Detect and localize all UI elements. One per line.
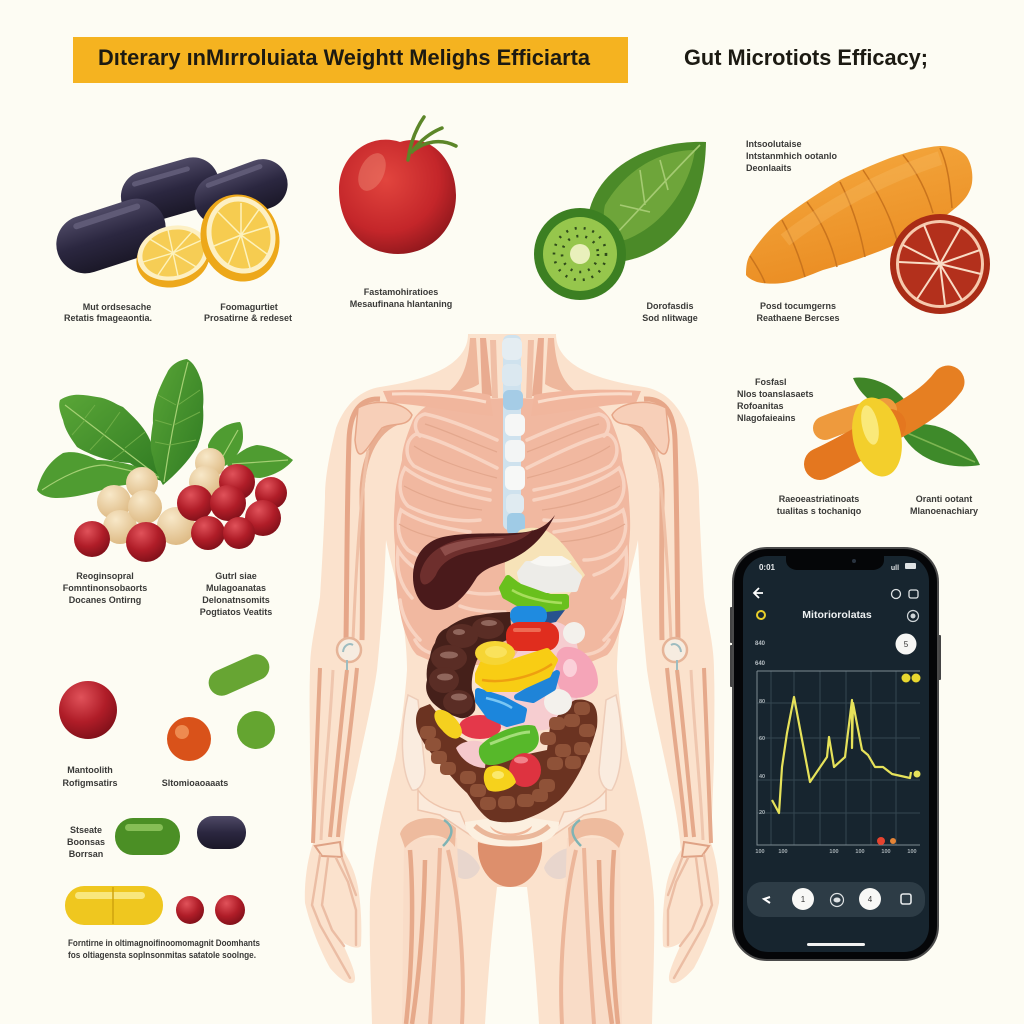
text labels: Retatis fmageaontia. xyxy=(64,313,152,323)
nav icons xyxy=(754,588,763,598)
stomach area behind organs xyxy=(505,528,585,600)
green upper band xyxy=(502,578,566,610)
blue behind xyxy=(517,673,557,700)
text labels: Nlagofaieains xyxy=(737,413,796,423)
food: carrots, yellow pill and leaves xyxy=(820,377,980,481)
line chart: 100 xyxy=(855,849,865,855)
spine xyxy=(502,335,525,535)
line chart: 100 xyxy=(881,849,891,855)
text labels xyxy=(62,139,978,960)
text labels: tualitas s tochaniqo xyxy=(777,506,862,516)
line chart: 100 xyxy=(829,849,839,855)
food: leaves with cream and red berries xyxy=(37,359,293,562)
text labels: Reoginsopral xyxy=(76,571,134,581)
text labels: Mut ordsesache xyxy=(83,302,151,312)
text labels: Oranti ootant xyxy=(916,494,972,504)
screen xyxy=(743,556,929,952)
food: sweet potato and blood orange xyxy=(746,146,990,314)
notch xyxy=(786,556,884,570)
pelvic bowl xyxy=(478,842,542,887)
digestive organs xyxy=(413,515,598,822)
body halves xyxy=(305,334,512,1024)
leaf right long xyxy=(227,445,293,478)
leaf left lower xyxy=(37,452,163,498)
blue large xyxy=(478,691,524,724)
text labels: Mantoolith xyxy=(67,765,113,775)
text labels: Mlanoenachiary xyxy=(910,506,978,516)
red ball xyxy=(509,753,541,787)
liver xyxy=(413,515,555,610)
text labels: Borrsan xyxy=(69,849,103,859)
text labels: Mesaufinana hlantaning xyxy=(350,299,452,309)
bottom toolbar: 4 xyxy=(868,895,873,904)
side buttons xyxy=(730,607,734,643)
large intestine xyxy=(416,699,597,822)
text labels: Gutrl siae xyxy=(215,571,257,581)
title banner: Dıterary ınMırroluiata Weightt Melighs Efficiarta xyxy=(98,45,591,70)
text labels: Rofoanitas xyxy=(737,401,784,411)
text labels: Raeoeastriatinoats xyxy=(779,494,859,504)
white upper band xyxy=(520,564,579,590)
smartphone app xyxy=(730,548,941,960)
app title: Mitoriorolatas xyxy=(802,609,872,621)
title banner xyxy=(73,37,628,83)
smartphone app: 640 xyxy=(755,661,766,667)
white balls xyxy=(563,622,585,644)
pink intestine xyxy=(556,647,598,698)
line chart xyxy=(755,671,920,855)
leaf left upper xyxy=(59,395,165,482)
text labels: Fastamohiratioes xyxy=(364,287,438,297)
yellow band xyxy=(478,651,555,689)
blue small xyxy=(540,610,565,625)
leaf right small xyxy=(208,422,243,466)
line chart: 60 xyxy=(759,736,765,742)
text labels: Boonsas xyxy=(67,837,105,847)
smartphone app: 5 xyxy=(904,640,909,649)
text labels: Prosatirne & redeset xyxy=(204,313,292,323)
line chart: 100 xyxy=(907,849,917,855)
green lower xyxy=(479,725,539,765)
text labels: Foomagurtiet xyxy=(220,302,278,312)
yellow lower xyxy=(484,766,516,792)
line chart: 100 xyxy=(755,849,765,855)
leaf centre xyxy=(151,359,203,485)
human body anatomy xyxy=(305,334,719,1024)
yellow left xyxy=(434,710,462,739)
line chart: 40 xyxy=(759,774,765,780)
line chart: 100 xyxy=(778,849,788,855)
status bar: 0:01 xyxy=(759,563,776,572)
text labels: Reathaene Bercses xyxy=(756,313,840,323)
line chart: 80 xyxy=(759,699,765,705)
small red xyxy=(459,715,501,739)
text labels: fos oltiagensta soplnsonmitas satatole soolnge. xyxy=(68,950,256,960)
text labels: Fomntinonsobaorts xyxy=(63,583,147,593)
text labels: Intstanmhich ootanlo xyxy=(746,151,838,161)
text labels: Deonlaaits xyxy=(746,163,792,173)
food: loose pills and capsules xyxy=(59,650,275,925)
line chart: 20 xyxy=(759,810,765,816)
red band xyxy=(506,622,559,651)
text labels: Rofigmsatirs xyxy=(62,778,118,788)
text labels: Sltomioaoaaats xyxy=(162,778,228,788)
text labels: Docanes Ontirng xyxy=(69,595,141,605)
bottom toolbar xyxy=(747,882,925,917)
text labels: Dorofasdis xyxy=(646,301,694,311)
smartphone app: ull xyxy=(891,565,899,572)
bottom toolbar: 1 xyxy=(801,895,806,904)
pale pink backing xyxy=(484,621,581,731)
food: dark pills and lemon slices xyxy=(49,151,295,295)
smartphone app: 840 xyxy=(755,641,766,647)
food: kiwi and green leaf xyxy=(534,142,706,300)
text labels: Intsoolutaise xyxy=(746,139,802,149)
text labels: Stseate xyxy=(70,825,102,835)
round button xyxy=(896,634,916,654)
text labels: Nlos toanslasaets xyxy=(737,389,814,399)
upper dark intestine xyxy=(426,612,512,718)
text labels: Fosfasl xyxy=(755,377,787,387)
text labels: Pogtiatos Veatits xyxy=(200,607,272,617)
text labels: Mulagoanatas xyxy=(206,583,266,593)
home indicator xyxy=(807,943,865,946)
text labels: Delonatnsomits xyxy=(202,595,270,605)
text labels: Forntirne in oltimagnoifinoomomagnit Doomhants xyxy=(68,938,260,948)
food: red apple xyxy=(339,117,456,254)
phone body xyxy=(733,548,938,960)
text labels: Sod nlitwage xyxy=(642,313,698,323)
secondary heading: Gut Microtiots Efficacy; xyxy=(684,45,928,70)
text labels: Posd tocumgerns xyxy=(760,301,836,311)
lower pink xyxy=(456,741,487,768)
